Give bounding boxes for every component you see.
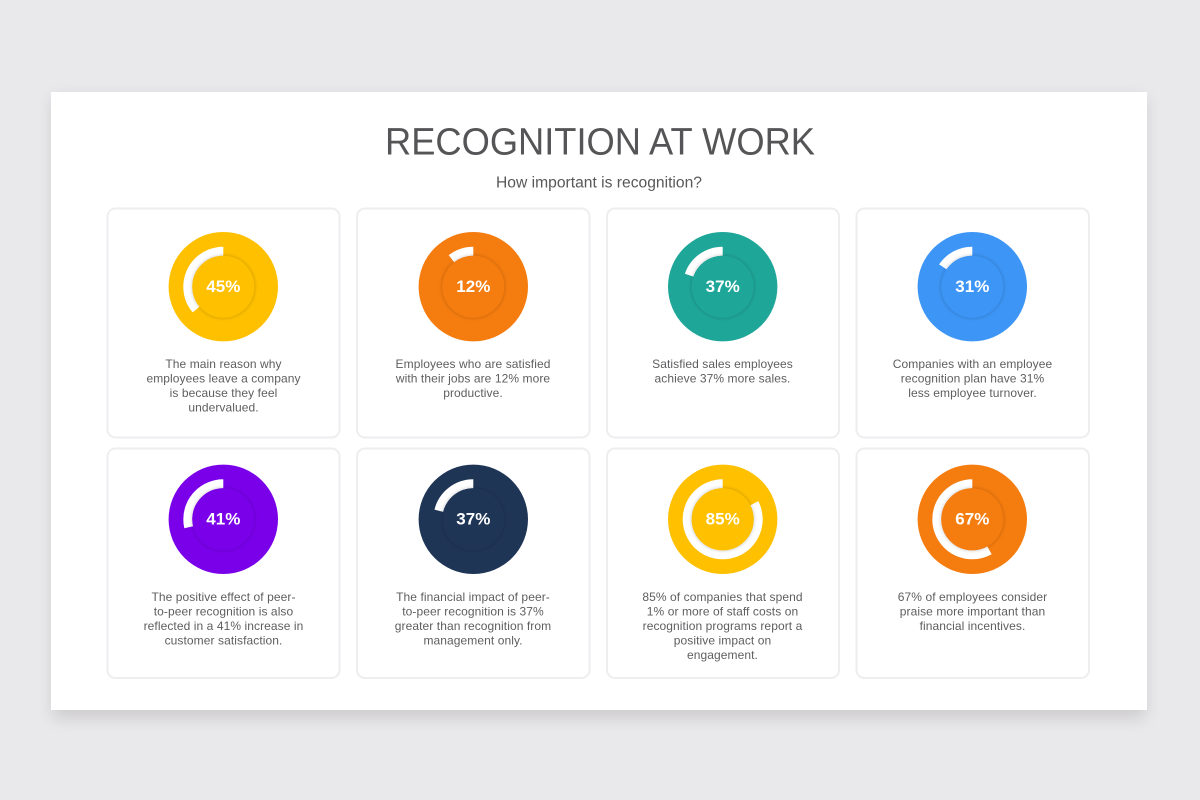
panel: 45% card — [108, 208, 340, 438]
description: greater than recognition from — [395, 619, 551, 633]
description: financial incentives. — [920, 619, 1025, 633]
description: The positive effect of peer- — [151, 590, 296, 604]
panel: 37% financial card — [357, 448, 590, 678]
description: employees leave a company — [146, 372, 301, 386]
description: recognition plan have 31% — [901, 372, 1044, 386]
description — [642, 590, 803, 662]
description — [395, 590, 551, 648]
description: Employees who are satisfied — [396, 357, 550, 371]
donut: 37% financial: 37% — [456, 510, 490, 529]
description — [146, 357, 301, 414]
description: productive. — [443, 386, 503, 400]
title: RECOGNITION AT WORK — [385, 122, 815, 164]
panel: 12% card — [357, 208, 590, 438]
description: customer satisfaction. — [165, 634, 282, 648]
description: engagement. — [687, 648, 758, 662]
description: to-peer recognition is 37% — [402, 604, 544, 618]
description: praise more important than — [900, 604, 1045, 618]
description — [395, 357, 550, 400]
description: achieve 37% more sales. — [655, 372, 790, 386]
panel: 85% card — [607, 448, 839, 678]
donut: 41% — [169, 465, 278, 574]
description: The main reason why — [165, 357, 282, 371]
donut: 37% sales: 37% — [706, 277, 740, 296]
description: management only. — [423, 634, 523, 648]
donut: 45% — [169, 232, 278, 341]
description: is because they feel — [170, 386, 277, 400]
description — [898, 590, 1047, 633]
donut: 12%: 12% — [456, 277, 490, 296]
donut: 45%: 45% — [206, 277, 240, 296]
panel: 41% card — [108, 448, 340, 678]
description: 67% of employees consider — [898, 590, 1047, 604]
description: undervalued. — [188, 400, 259, 414]
description: positive impact on — [674, 634, 771, 648]
description — [652, 357, 793, 386]
panel: main slide — [51, 92, 1147, 718]
panel: 67% card — [856, 448, 1089, 678]
donut: 31% — [918, 232, 1027, 341]
description: recognition programs report a — [643, 619, 803, 633]
donut: 67%: 67% — [955, 510, 989, 529]
donut: 85%: 85% — [706, 510, 740, 529]
subtitle: How important is recognition? — [496, 174, 702, 192]
description — [144, 590, 303, 648]
donut: 67% — [918, 465, 1027, 574]
description: 85% of companies that spend — [642, 590, 803, 604]
description: Companies with an employee — [893, 357, 1052, 371]
panel: 31% card — [856, 208, 1089, 438]
panel: 37% sales card — [607, 208, 839, 438]
description: 1% or more of staff costs on — [647, 604, 798, 618]
description: The financial impact of peer- — [396, 590, 550, 604]
donut: 85% — [668, 465, 777, 574]
donut: 12% — [419, 232, 528, 341]
donut: 31%: 31% — [955, 277, 989, 296]
description: less employee turnover. — [908, 386, 1037, 400]
description: Satisfied sales employees — [652, 357, 793, 371]
description: with their jobs are 12% more — [395, 372, 550, 386]
donut: 37% financial — [419, 465, 528, 574]
donut: 41%: 41% — [206, 510, 240, 529]
description: reflected in a 41% increase in — [144, 619, 303, 633]
description: to-peer recognition is also — [154, 604, 294, 618]
description — [893, 357, 1052, 400]
donut: 37% sales — [668, 232, 777, 341]
